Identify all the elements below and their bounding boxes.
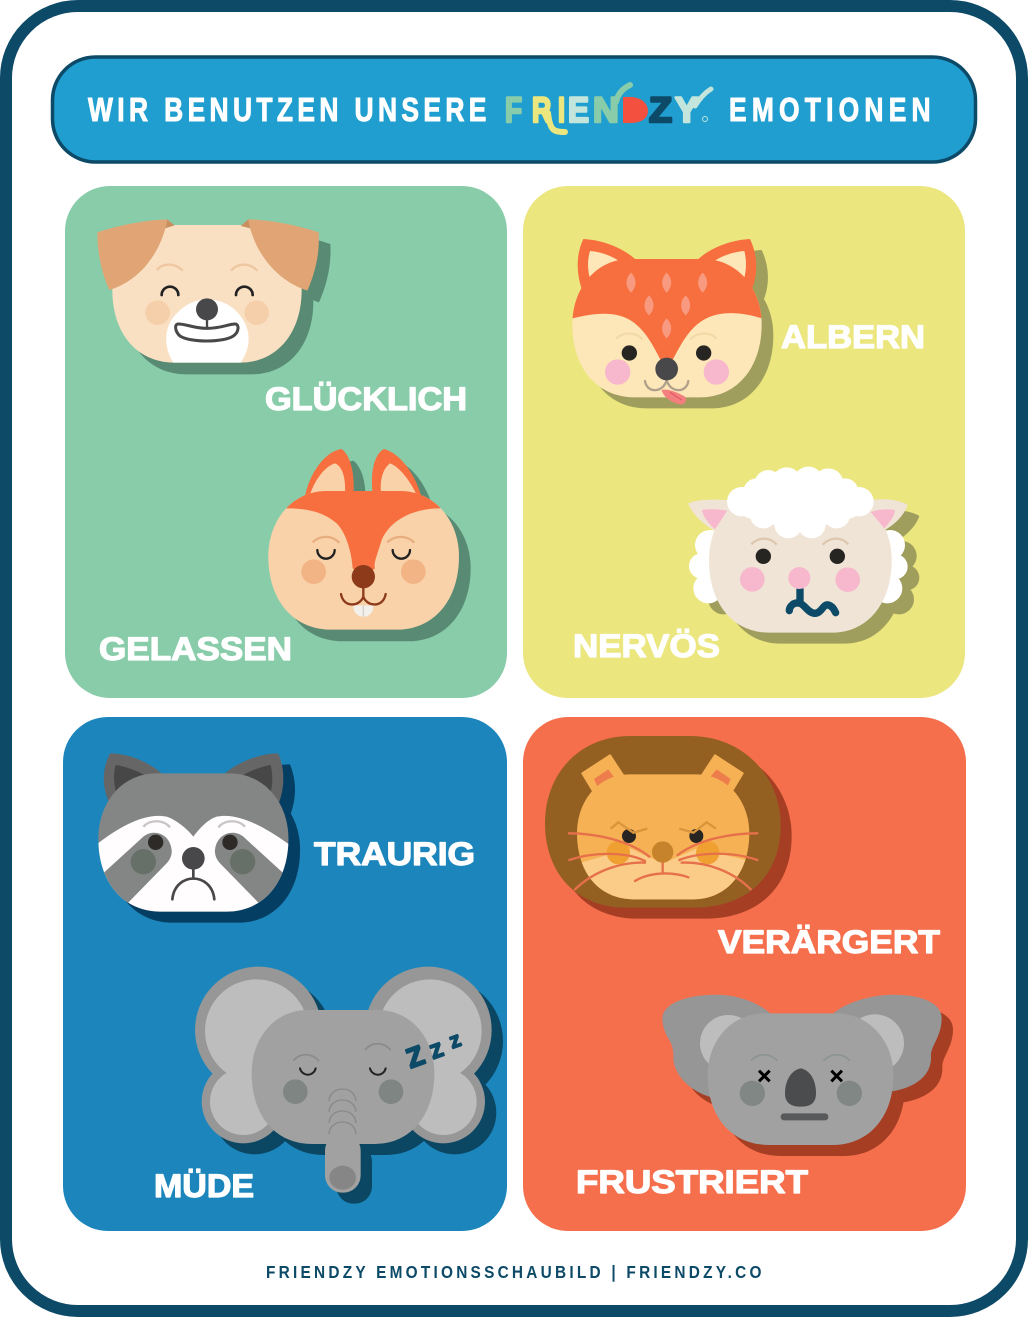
logo: friendzy: Y <box>675 91 698 130</box>
icon: frustrated koala <box>662 995 953 1156</box>
title banner: WIR BENUTZEN UNSERE <box>88 92 486 129</box>
sleeping zzz: Z <box>402 1039 428 1074</box>
label: Müde: MÜDE <box>154 1168 254 1204</box>
sleeping zzz <box>402 1033 463 1074</box>
icon: silly fox <box>567 239 773 408</box>
sleeping zzz: Z <box>448 1033 463 1052</box>
label: Verärgert: VERÄRGERT <box>718 924 941 960</box>
logo: friendzy <box>505 85 711 132</box>
sleeping zzz: Z <box>428 1040 446 1064</box>
label: Frustriert: FRUSTRIERT <box>576 1164 809 1200</box>
panel: yellow <box>523 186 965 698</box>
icon: happy dog <box>97 219 331 374</box>
logo: friendzy: N <box>593 91 619 130</box>
icon: tired elephant <box>195 967 503 1204</box>
label: Albern: ALBERN <box>781 319 925 355</box>
icon: calm squirrel <box>267 449 471 641</box>
title banner: EMOTIONEN <box>729 92 931 129</box>
logo: friendzy: R <box>532 90 551 130</box>
footer: FRIENDZY EMOTIONSSCHAUBILD | FRIENDZY.CO <box>266 1263 762 1282</box>
logo: friendzy: E <box>568 92 589 130</box>
label: Nervös: NERVÖS <box>573 628 720 664</box>
label: Traurig: TRAURIG <box>314 836 475 872</box>
logo: friendzy: I <box>558 91 565 130</box>
panel: orange <box>523 717 966 1231</box>
label: Gelassen: GELASSEN <box>99 631 292 667</box>
label: Glücklich: GLÜCKLICH <box>265 381 467 417</box>
title banner <box>52 57 976 162</box>
icon: nervous sheep <box>688 467 919 644</box>
icon: angry lion <box>545 736 792 919</box>
logo: friendzy: F <box>505 90 522 130</box>
icon: sad raccoon <box>90 753 300 923</box>
logo: friendzy: Z <box>649 90 672 130</box>
panel: blue <box>63 717 507 1231</box>
panel: calm green <box>65 186 507 698</box>
